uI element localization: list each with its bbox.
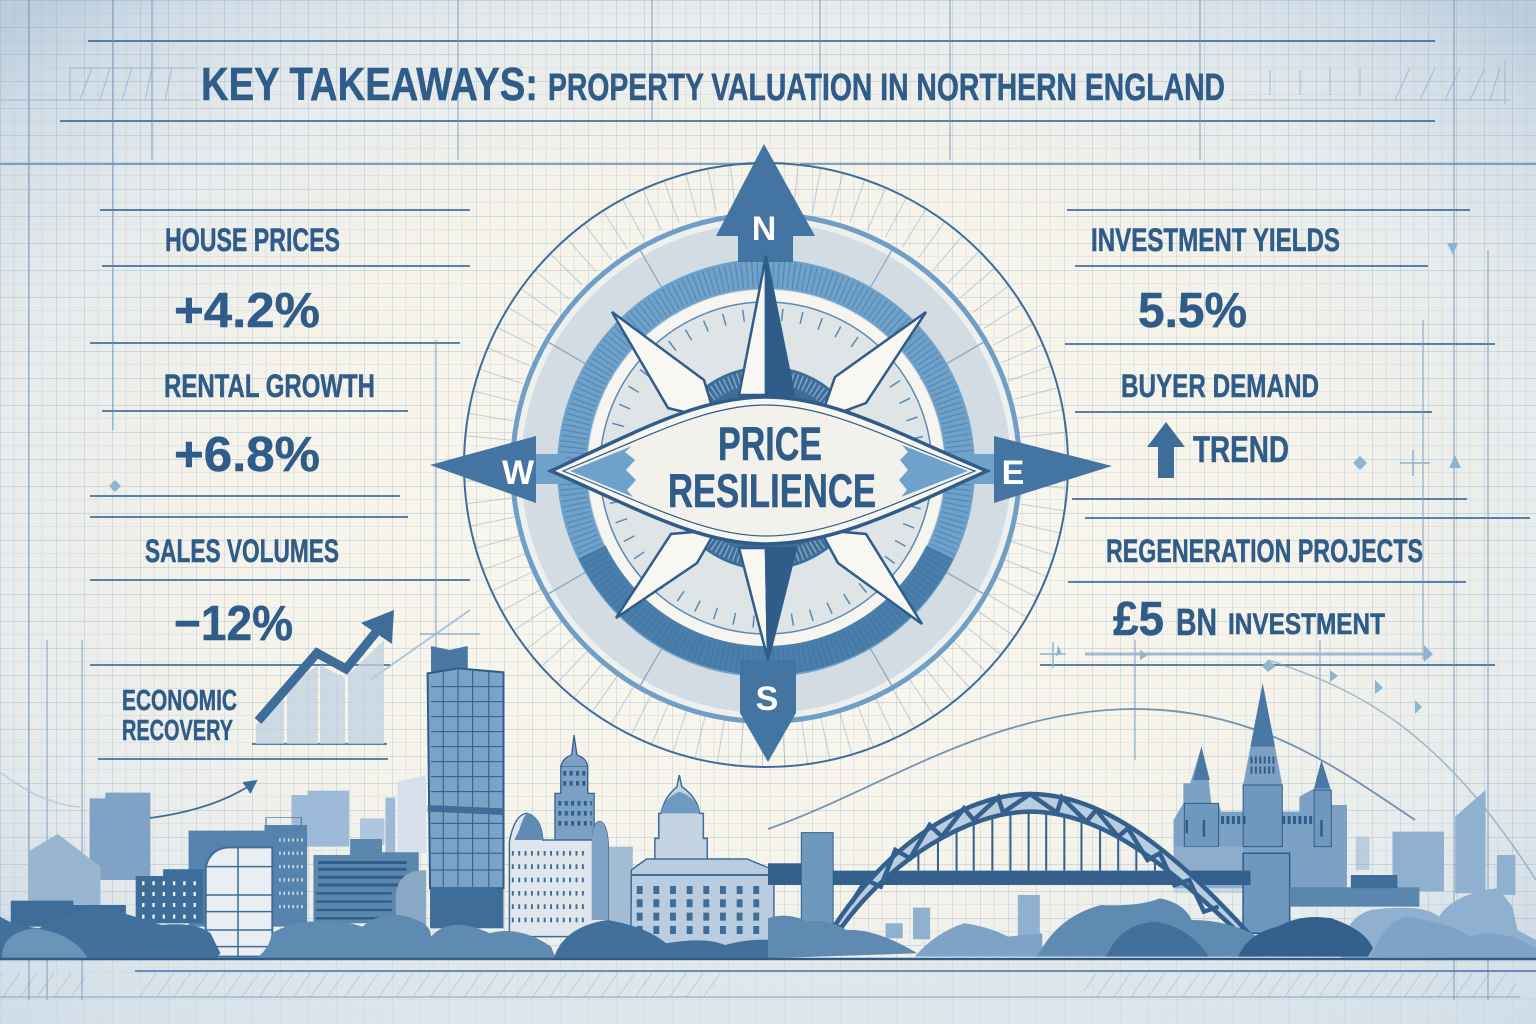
metric: sales volumes: −12% [174,597,293,651]
metric: sales volumes: SALES VOLUMES [145,533,339,569]
chart: economic recovery: ECONOMIC [122,685,237,717]
metric: investment yields [1091,222,1340,338]
metric: buyer demand: BUYER DEMAND [1121,368,1319,404]
trees: right [768,888,1536,958]
skyline: right [768,683,1536,958]
glass tower [428,646,504,928]
central lens: PRICE [718,417,822,470]
background skyline [886,790,1515,939]
metric: regeneration projects [1106,533,1423,646]
metric: sales volumes [145,533,339,651]
metric: rental growth [164,368,375,482]
civic buildings [509,735,774,947]
arrow: south: S [756,680,778,718]
chart: economic recovery [122,610,394,747]
arrow: west [430,436,566,503]
metric: buyer demand [1121,368,1319,478]
title [201,58,1225,110]
decorative markers [109,243,1461,714]
arrow: north [716,144,815,262]
title: KEY TAKEAWAYS: [201,58,538,110]
metric: house prices [165,222,340,338]
central lens [551,397,987,544]
compass rings [464,163,1068,767]
ground strip [0,959,1536,997]
icon: up arrow [1147,422,1185,478]
metric: regeneration projects: BN [1176,602,1217,644]
decorative title sketches [0,60,1510,104]
title: PROPERTY VALUATION IN NORTHERN ENGLAND [548,67,1225,109]
background towers [28,775,426,907]
metric: regeneration projects: REGENERATION PROJECTS [1106,533,1423,569]
arrow: small growth curve [150,781,256,818]
metric: regeneration projects: £5 [1113,593,1164,646]
metric: house prices: +4.2% [174,284,320,338]
chart: economic recovery: RECOVERY [122,715,233,747]
metric: regeneration projects: INVESTMENT [1228,608,1385,641]
central lens: RESILIENCE [668,464,876,517]
arrow: north: N [752,210,776,248]
compass star [612,256,926,660]
trees: left [0,905,774,959]
arrow: south [740,660,796,762]
compass [430,144,1112,767]
metric: investment yields: 5.5% [1138,284,1247,338]
metric: buyer demand: TREND [1193,429,1289,470]
arrow: west: W [502,454,535,492]
castle [1174,683,1419,933]
metric: rental growth: +6.8% [174,428,320,482]
metric: investment yields: INVESTMENT YIELDS [1091,222,1340,258]
tyne bridge [768,794,1250,930]
panel: left metrics [145,222,375,651]
mid-rise offices [11,818,426,957]
arrow: east [957,436,1112,503]
skyline: left [0,646,774,959]
panel: right metrics [1091,222,1423,646]
arrow: east: E [1002,454,1024,492]
metric: rental growth: RENTAL GROWTH [164,368,375,404]
metric: house prices: HOUSE PRICES [165,222,340,258]
